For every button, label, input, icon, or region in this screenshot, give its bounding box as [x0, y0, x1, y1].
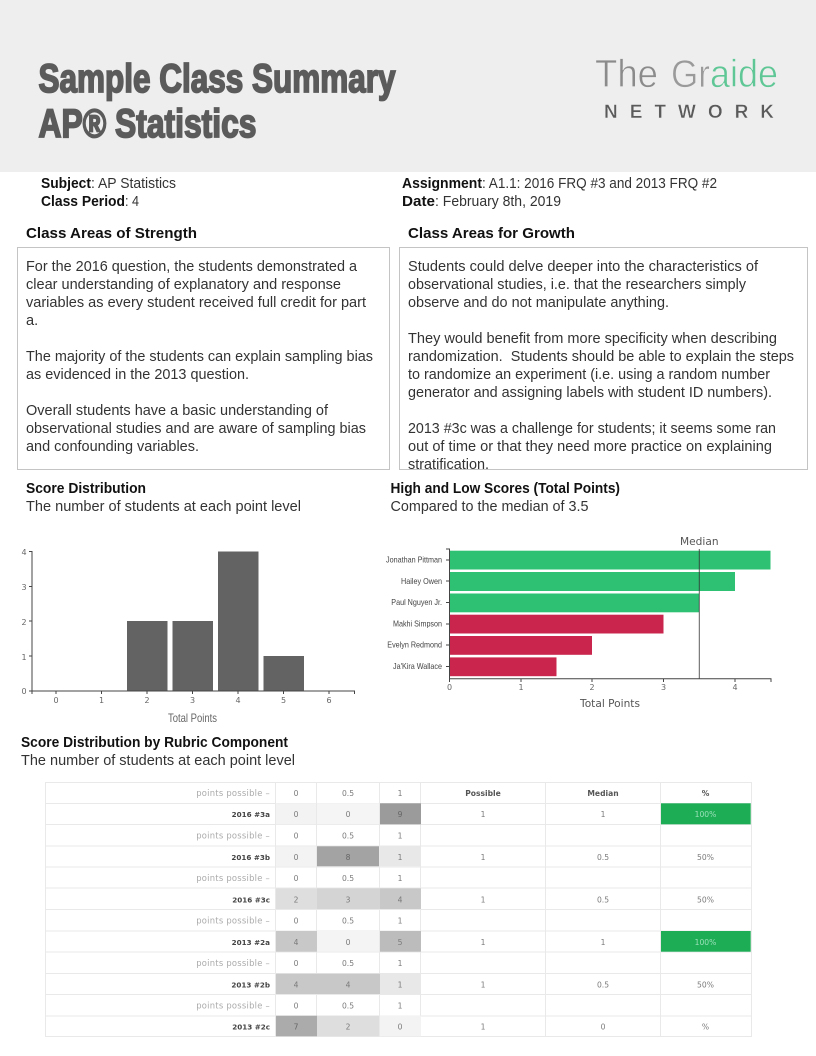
axis numbers: 3: [661, 683, 666, 692]
column headers: %: [702, 789, 710, 798]
header band: [0, 0, 816, 172]
panel: strengths: as evidenced in the 2013 question.: [26, 367, 249, 383]
heat cells: [276, 803, 751, 1036]
row: 2013 #2b: 1: [398, 980, 403, 990]
row: 2016 #3a: 2016 #3a: [232, 810, 270, 819]
axis numbers: 0: [21, 687, 27, 696]
heading: rubric component: [21, 735, 295, 769]
axis numbers: 4: [21, 548, 27, 557]
student names: Hailey Owen: [401, 576, 442, 586]
heading: class areas for growth: Class Areas for Growth: [408, 226, 575, 242]
row: 2013 #2c: %: [702, 1022, 709, 1032]
subject and class period: : 4: [125, 194, 139, 210]
axis numbers: 3: [190, 696, 195, 705]
row: points possible: 1: [398, 959, 403, 968]
row: 2013 #2c: 7: [294, 1022, 299, 1032]
row: 2016 #3a: 1: [481, 810, 486, 819]
row: 2016 #3a: 0: [294, 810, 299, 819]
row: 2016 #3c: 0.5: [597, 896, 609, 904]
panel: strengths: variables as every student received full credit for part: [26, 295, 366, 311]
row: points possible: 0: [294, 916, 299, 926]
row: 2013 #2a: [232, 938, 716, 947]
axis numbers: 1: [518, 683, 524, 692]
heading: rubric component: Score Distribution by Rubric Component: [21, 735, 288, 751]
row: 2016 #3a: 0: [346, 810, 351, 819]
student names: Makhi Simpson: [393, 618, 442, 628]
title: Sample Class Summary: [38, 57, 396, 101]
row: points possible: 0: [294, 874, 299, 883]
row: points possible: [196, 916, 403, 926]
panel: growth: They would benefit from more specificity when describing: [408, 331, 777, 347]
row: points possible: 1: [398, 874, 403, 883]
subject and class period: [41, 176, 176, 210]
bar chart: score distribution: [21, 548, 354, 725]
axis numbers: 0: [447, 683, 452, 692]
row: points possible: 0.5: [342, 832, 354, 840]
row: 2016 #3c: 2: [294, 896, 299, 904]
row: points possible: 1: [398, 1002, 403, 1010]
row: points possible: [196, 1000, 403, 1010]
heading: rubric component: The number of students at each point level: [21, 753, 295, 769]
panel: strengths: The majority of the students can explain sampling bias: [26, 349, 373, 365]
column headers: Possible: [465, 789, 501, 798]
heading: class areas of strength: Class Areas of Strength: [26, 226, 197, 242]
heading: score distribution: [26, 481, 301, 515]
panel: growth: observe and do not manipulate anything.: [408, 295, 669, 311]
row: 2013 #2b: 0.5: [597, 980, 609, 990]
logo: The Graide Network: [595, 53, 778, 123]
row: 2016 #3a: [232, 810, 716, 819]
row: 2016 #3b: 0.5: [597, 853, 609, 862]
row: points possible: points possible –: [196, 873, 270, 883]
panel: growth: 2013 #3c was a challenge for students; it seems some ran: [408, 421, 776, 437]
row: 2013 #2c: [232, 1022, 709, 1032]
column headers: Median: [587, 789, 619, 798]
row: points possible: 0.5: [342, 959, 354, 968]
row: points possible: 0.5: [342, 874, 354, 883]
assignment and date: Date: [402, 194, 435, 210]
panel: growth: [400, 248, 808, 473]
axes: [446, 549, 771, 682]
row: 2016 #3b: [231, 853, 714, 862]
row: points possible: 0: [294, 832, 299, 840]
row: 2013 #2c: 2013 #2c: [232, 1022, 270, 1032]
row: points possible: 0.5: [342, 916, 354, 926]
panel: growth: out of time or that they need more practice on explaining: [408, 439, 772, 455]
row: 2016 #3c: 1: [481, 896, 486, 904]
table: rubric scores: [46, 782, 752, 1037]
row: 2016 #3c: 2016 #3c: [232, 896, 270, 904]
row: 2013 #2a: 2013 #2a: [232, 938, 270, 947]
row: 2013 #2a: 1: [601, 938, 606, 947]
logo: The Graide Network: NETWORK: [604, 102, 774, 123]
row: 2016 #3a: 9: [398, 810, 403, 819]
row: points possible: 0: [294, 959, 299, 968]
green bars: [450, 551, 770, 612]
bar chart: high and low scores: [386, 536, 771, 710]
panel: strengths: observational studies and are aware of sampling bias: [26, 421, 366, 437]
axis numbers: [447, 683, 738, 692]
row: points possible: points possible –: [196, 958, 270, 968]
row: points possible: [196, 830, 403, 840]
logo: The Graide Network: Gr: [671, 53, 710, 96]
row: points possible: 1: [398, 832, 403, 840]
panel: growth: observational studies, i.e. that the researchers simply: [408, 277, 747, 293]
panel: growth: stratification.: [408, 457, 489, 473]
red bars: [450, 615, 664, 676]
row: 2013 #2b: 2013 #2b: [231, 980, 270, 990]
axis numbers: 2: [144, 696, 150, 705]
axis numbers: 1: [99, 696, 104, 705]
row: points possible: points possible –: [196, 830, 270, 840]
row: 2016 #3c: [232, 896, 714, 904]
student names: Jonathan Pittman: [386, 554, 442, 564]
row: 2016 #3a: 100%: [695, 810, 716, 819]
student names: [386, 554, 442, 671]
axis numbers: 2: [21, 618, 27, 627]
grid lines: [46, 782, 752, 1037]
logo: The Graide Network: aide: [710, 53, 778, 96]
subject and class period: Subject: [41, 176, 91, 192]
row: 2013 #2c: 0: [601, 1022, 606, 1032]
panel: growth: Students could delve deeper into the characteristics of: [408, 259, 759, 275]
row: 2013 #2a: 4: [294, 938, 299, 947]
row: points possible: 0: [294, 1002, 299, 1010]
heading: score distribution: The number of students at each point level: [26, 499, 301, 515]
title: AP® Statistics: [38, 102, 256, 146]
row: 2013 #2c: 2: [346, 1022, 351, 1032]
axis numbers: 3: [21, 583, 27, 592]
column headers: [196, 788, 710, 798]
row: 2013 #2a: 0: [346, 938, 351, 947]
row: 2016 #3b: 8: [346, 853, 351, 862]
student names: Ja'Kira Wallace: [393, 661, 442, 671]
row: points possible: points possible –: [196, 1000, 270, 1010]
row: points possible: points possible –: [196, 916, 270, 926]
assignment and date: : A1.1: 2016 FRQ #3 and 2013 FRQ #2: [482, 176, 717, 192]
row: 2013 #2c: 0: [398, 1022, 403, 1032]
row: 2013 #2a: 5: [398, 938, 403, 947]
row: points possible: [196, 958, 403, 968]
axis numbers: 0: [53, 696, 59, 705]
axis title: Total Points: [168, 711, 217, 725]
row: 2016 #3a: 1: [601, 810, 606, 819]
row: 2013 #2b: 50%: [697, 980, 714, 990]
column headers: 0: [294, 789, 299, 798]
axis numbers: 4: [732, 683, 738, 692]
subject and class period: Class Period: [41, 194, 125, 210]
row: points possible: [196, 873, 403, 883]
assignment and date: Assignment: [402, 176, 482, 192]
row: points possible: 1: [398, 916, 403, 926]
row: 2016 #3c: 3: [346, 896, 351, 904]
row: 2013 #2c: 1: [481, 1022, 486, 1032]
axis numbers: 4: [235, 696, 241, 705]
heading: score distribution: Score Distribution: [26, 481, 146, 497]
axes: [29, 552, 354, 694]
heading: high and low scores: High and Low Scores (Total Points): [390, 481, 620, 497]
assignment and date: [402, 176, 717, 210]
column headers: 0.5: [342, 789, 354, 798]
row: 2013 #2a: 100%: [695, 938, 716, 947]
axis numbers: 2: [589, 683, 595, 692]
median line: Median: [680, 536, 719, 548]
panel: strengths: and confounding variables.: [26, 439, 199, 455]
axis title: Total Points: [579, 698, 640, 710]
student names: Paul Nguyen Jr.: [391, 597, 442, 607]
axis numbers: 5: [281, 696, 286, 705]
panel: growth: to randomize an experiment (i.e. using a random number: [408, 367, 770, 383]
title: [38, 57, 396, 146]
student names: Evelyn Redmond: [387, 640, 442, 650]
row: 2016 #3b: 1: [398, 853, 403, 862]
row: 2016 #3b: 50%: [697, 853, 714, 862]
panel: strengths: [18, 248, 390, 470]
heading: high and low scores: [390, 481, 620, 515]
axis numbers: [21, 548, 332, 705]
panel: strengths: clear understanding of explanatory and response: [26, 277, 341, 293]
row: 2013 #2b: 4: [346, 980, 351, 990]
assignment and date: : February 8th, 2019: [435, 194, 561, 210]
panel: growth: generator and assigning labels with student ID numbers).: [408, 385, 772, 401]
row: 2016 #3b: 2016 #3b: [231, 853, 270, 862]
row: 2013 #2b: 1: [481, 980, 486, 990]
panel: strengths: Overall students have a basic understanding of: [26, 403, 329, 419]
axis numbers: 6: [326, 696, 332, 705]
row: 2016 #3b: 1: [481, 853, 486, 862]
subject and class period: : AP Statistics: [91, 176, 176, 192]
row: 2016 #3b: 0: [294, 853, 299, 862]
row: points possible: 0.5: [342, 1002, 354, 1010]
panel: strengths: a.: [26, 313, 38, 329]
axis numbers: 1: [21, 653, 27, 662]
panel: growth: randomization. Students should be able to explain the steps: [408, 349, 794, 365]
bars: [127, 552, 304, 691]
row: 2013 #2b: 4: [294, 980, 299, 990]
row: 2013 #2b: [231, 980, 714, 990]
panel: strengths: For the 2016 question, the students demonstrated a: [26, 259, 358, 275]
row: 2013 #2a: 1: [481, 938, 486, 947]
row: 2016 #3c: 4: [398, 896, 403, 904]
heading: high and low scores: Compared to the median of 3.5: [390, 499, 588, 515]
column headers: points possible –: [196, 788, 270, 798]
row: 2016 #3c: 50%: [697, 896, 714, 904]
column headers: 1: [398, 789, 403, 798]
logo: The Graide Network: The: [595, 53, 658, 96]
